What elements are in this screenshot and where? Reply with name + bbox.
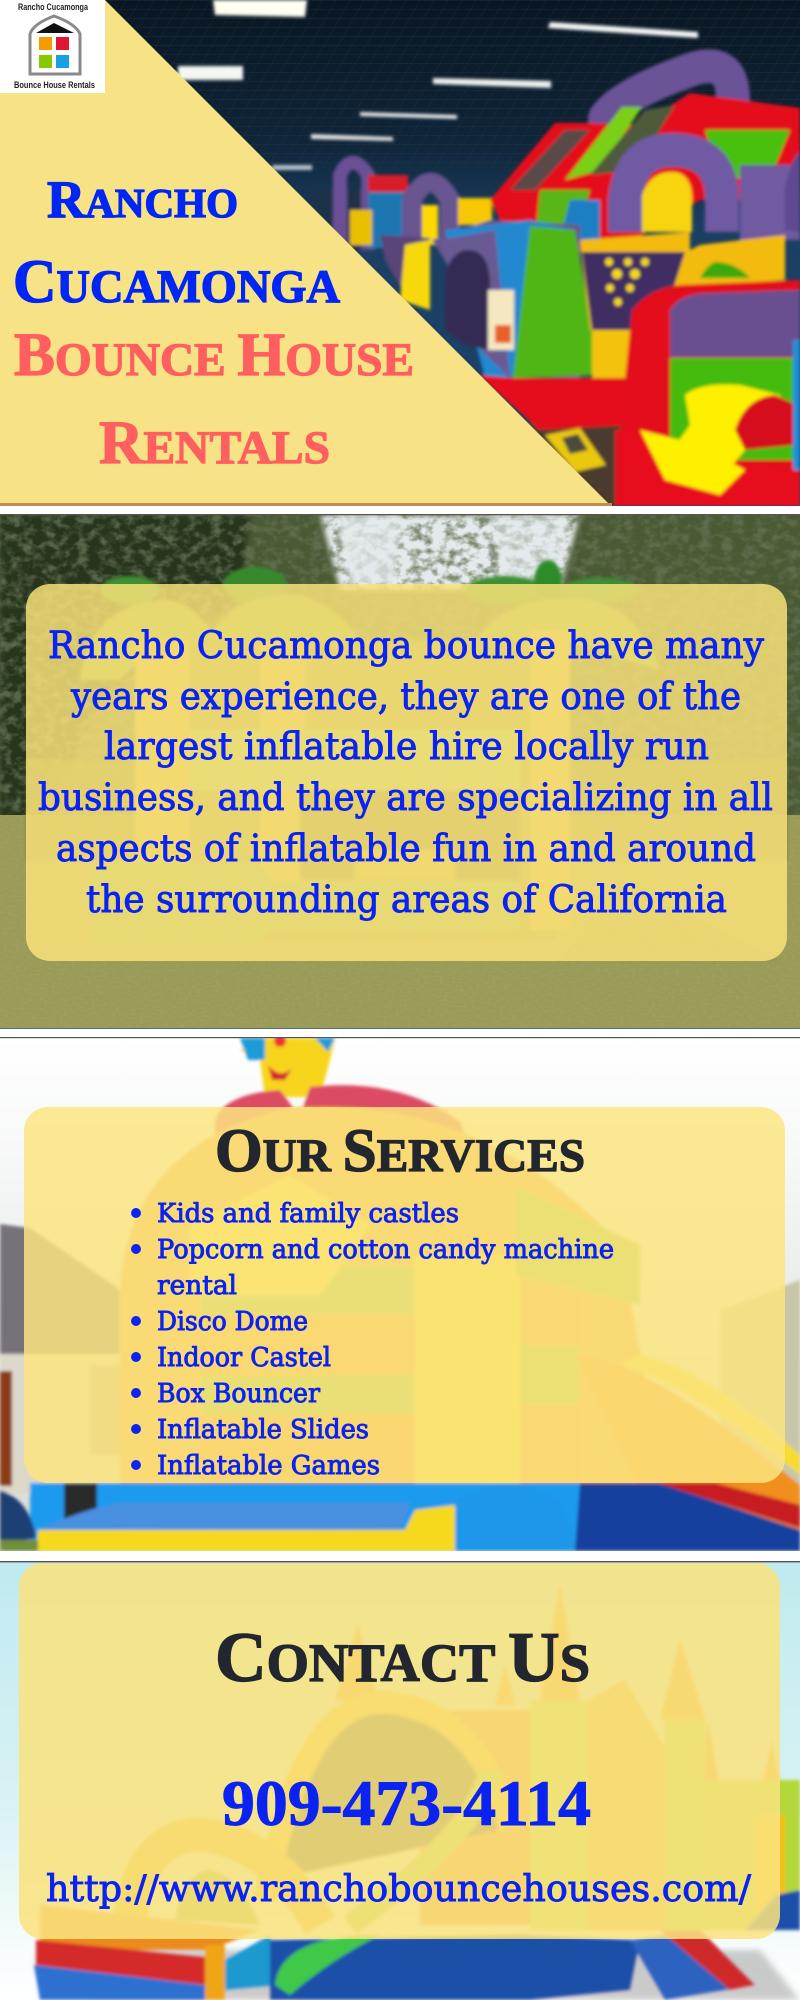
logo box: Bounce House Rentals (14, 80, 95, 90)
heading: Contact Us: CONTACT US (215, 1619, 590, 1697)
title: Rancho Cucamonga Bounce House Rentals: BOUNCE HOUSE (14, 322, 414, 389)
castle (120, 1107, 650, 1490)
panel: about (0, 515, 800, 1028)
floor (530, 420, 630, 506)
text block: about paragraph (38, 624, 773, 921)
tan base strip (0, 503, 612, 506)
logo box: Rancho Cucamonga (18, 2, 89, 12)
list: services: Kids and family castles (157, 1199, 459, 1229)
text block: about paragraph: the surrounding areas of California (86, 878, 727, 921)
base (30, 1483, 580, 1551)
icon: house (30, 16, 80, 74)
translucent card (26, 584, 787, 961)
title: Rancho Cucamonga Bounce House Rentals (13, 171, 414, 477)
text block: about paragraph: largest inflatable hire locally run (104, 725, 709, 768)
list: services: Disco Dome (157, 1307, 308, 1337)
text block: about paragraph: business, and they are specializing in all (38, 776, 773, 819)
divider lines (0, 514, 800, 1562)
castle body (420, 1710, 530, 1925)
panel: our services (0, 1035, 800, 1551)
translucent card (24, 1107, 785, 1483)
red base (478, 375, 630, 430)
photo: clown castle bounce house (0, 1035, 800, 1551)
website url: http://www.ranchobouncehouses.com/ (46, 1869, 752, 1910)
text block: about paragraph: aspects of inflatable fun in and around (56, 827, 756, 870)
hero photo: indoor inflatable park (105, 0, 800, 506)
title: Rancho Cucamonga Bounce House Rentals: RENTALS (99, 410, 330, 477)
yellow mini & net (380, 235, 430, 300)
logo box (0, 0, 105, 93)
slide (576, 1356, 800, 1533)
green & purple block (432, 220, 580, 378)
list: services: Popcorn and cotton candy machine (157, 1235, 614, 1265)
title: Rancho Cucamonga Bounce House Rentals: RANCHO (47, 171, 238, 229)
purple arches (740, 165, 800, 240)
text block: about paragraph: Rancho Cucamonga bounce have many (48, 624, 764, 667)
panel: contact (0, 1563, 800, 2000)
arch tunnels (286, 1712, 498, 1873)
top purple tube (605, 66, 733, 118)
small far arches (310, 190, 410, 250)
photo: jungle bounce house on lawn (0, 515, 800, 1028)
list: services: Inflatable Games (157, 1451, 380, 1481)
list: services: rental (157, 1271, 237, 1301)
house left (0, 1222, 120, 1356)
list: services: Inflatable Slides (157, 1415, 369, 1445)
photo: castle combo inflatable (0, 1563, 800, 2000)
yellow wedge on floor (545, 428, 606, 472)
tan triangle overlay (0, 0, 608, 503)
translucent card (19, 1563, 780, 1939)
pink arc (214, 1082, 464, 1134)
title: Rancho Cucamonga Bounce House Rentals: CUCAMONGA (13, 249, 340, 316)
list: services: Box Bouncer (157, 1379, 321, 1409)
panel: hero header (0, 0, 800, 506)
phone number: 909-473-4114 (222, 1768, 591, 1840)
clown (240, 1038, 335, 1097)
red slide tower (490, 93, 800, 260)
list: services: Indoor Castel (157, 1343, 331, 1373)
inflatable (100, 576, 160, 604)
text block: about paragraph: years experience, they are one of the (70, 675, 741, 718)
list: services (132, 1199, 614, 1481)
right red block (618, 278, 800, 482)
base (36, 1940, 205, 1985)
heading: Our Services: OUR SERVICES (215, 1118, 585, 1185)
spires (335, 1625, 378, 1700)
